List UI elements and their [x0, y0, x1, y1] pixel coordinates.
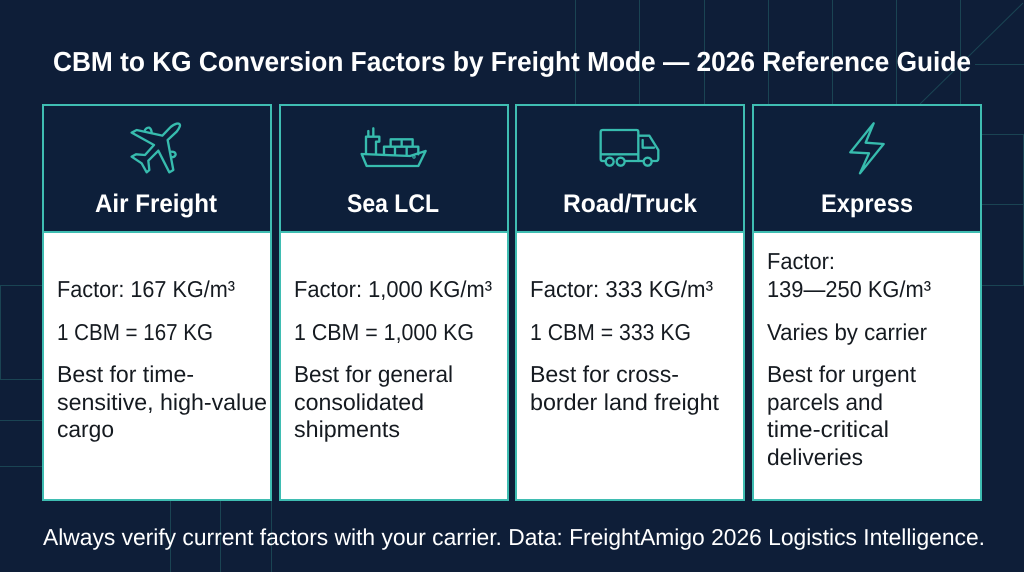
panel: road truck: [516, 105, 744, 500]
text: air freight details: 1 CBM = 167 KG: [57, 319, 213, 345]
heading: air freight: Air Freight: [95, 190, 217, 218]
icon: truck: [601, 130, 658, 166]
text: sea lcl details: Factor: 1,000 KG/m³: [294, 276, 492, 302]
text: express details: [767, 248, 931, 470]
text: express details: Best for urgent: [767, 361, 917, 387]
panel: sea lcl: [280, 105, 508, 500]
text: air freight details: Factor: 167 KG/m³: [57, 276, 235, 302]
text: express details: Varies by carrier: [767, 319, 927, 345]
text: road truck details: Factor: 333 KG/m³: [530, 276, 713, 302]
icon: airplane: [132, 124, 180, 172]
text: air freight details: [57, 276, 267, 442]
text: air freight details: sensitive, high-value: [57, 389, 267, 415]
heading: road truck: Road/Truck: [563, 190, 698, 218]
text: road truck details: Best for cross-: [530, 361, 679, 387]
text: sea lcl details: [294, 276, 492, 442]
panel: air freight: [43, 105, 271, 500]
text: express details: parcels and: [767, 389, 883, 415]
text: air freight details: Best for time-: [57, 361, 194, 387]
text: sea lcl details: 1 CBM = 1,000 KG: [294, 319, 474, 345]
text: express details: 139—250 KG/m³: [767, 276, 931, 302]
text: express details: Factor:: [767, 248, 835, 274]
text: air freight details: cargo: [57, 416, 114, 442]
text: road truck details: 1 CBM = 333 KG: [530, 319, 691, 345]
footer note: Always verify current factors with your carrier. Data: FreightAmigo 2026 Logistics Intelligence.: [43, 524, 985, 550]
icon: cargo ship: [362, 128, 426, 166]
text: express details: deliveries: [767, 444, 863, 470]
text: sea lcl details: shipments: [294, 416, 400, 442]
heading: express: Express: [821, 190, 913, 218]
title: CBM to KG Conversion Factors by Freight Mode — 2026 Reference Guide: [53, 46, 971, 77]
text: express details: time-critical: [767, 416, 889, 442]
heading: sea lcl: Sea LCL: [347, 190, 439, 218]
text: sea lcl details: consolidated: [294, 389, 424, 415]
panel: express: [753, 105, 981, 500]
text: sea lcl details: Best for general: [294, 361, 453, 387]
text: road truck details: border land freight: [530, 389, 720, 415]
icon: lightning bolt: [850, 123, 884, 173]
text: road truck details: [530, 276, 720, 415]
